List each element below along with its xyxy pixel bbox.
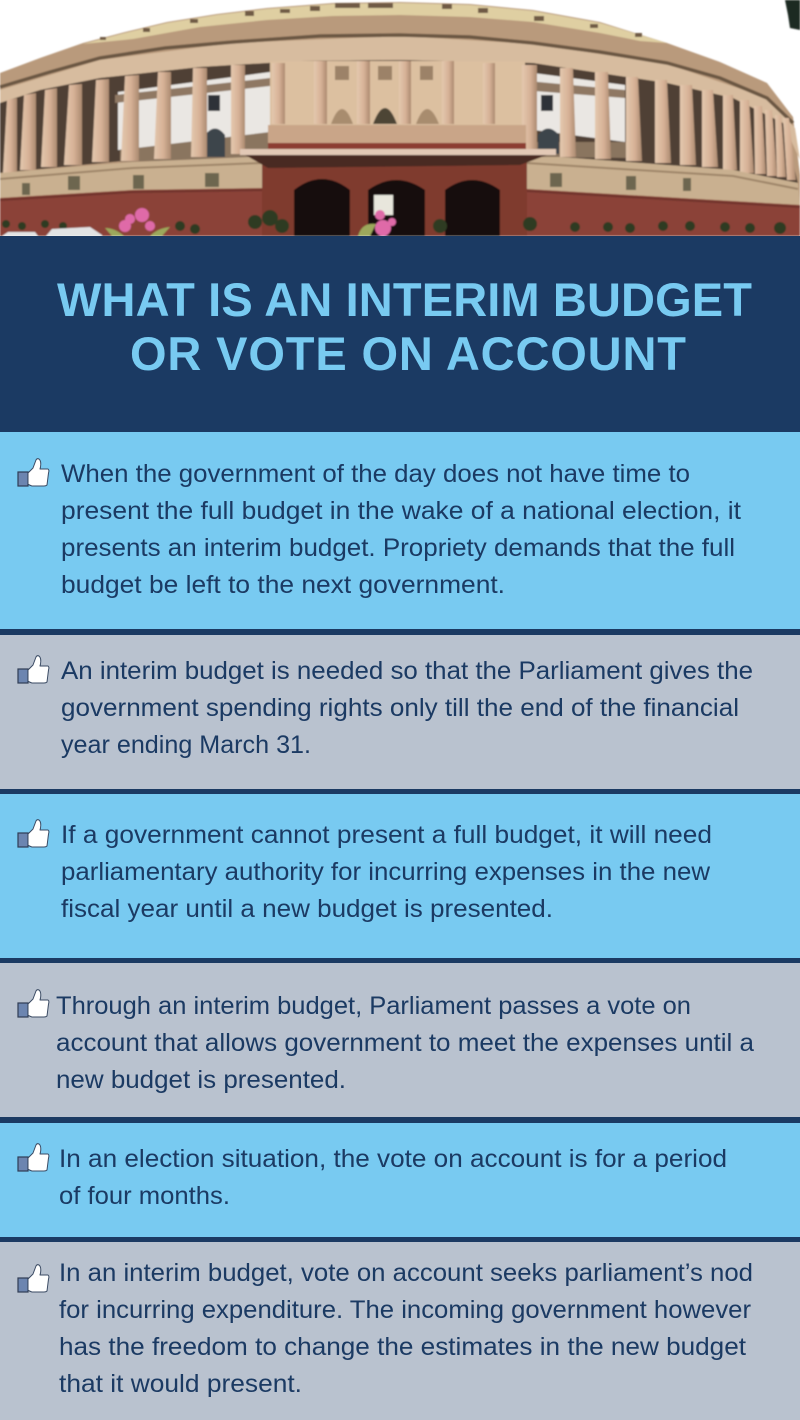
panel: spending rights <box>0 635 800 789</box>
pink flowers <box>119 208 396 236</box>
icon: thumbs up <box>18 459 49 486</box>
text block: new budget is presented. <box>56 1066 346 1094</box>
icon: thumbs up <box>18 656 49 683</box>
text block <box>59 1145 727 1210</box>
text block: present the full budget in the wake of a national election, it <box>61 497 741 525</box>
text block: In an interim budget, vote on account seeks parliament’s nod <box>59 1259 753 1287</box>
tree <box>785 0 800 30</box>
text block <box>61 821 712 923</box>
building mass <box>0 2 800 236</box>
panel: freedom to change estimates <box>0 1242 800 1420</box>
text block <box>61 460 741 599</box>
plinth <box>0 157 800 205</box>
text block: parliamentary authority for incurring expenses in the new <box>61 858 711 886</box>
panel: parliamentary authority <box>0 794 800 958</box>
car <box>46 227 102 236</box>
colonnade wall <box>0 60 798 183</box>
text block <box>61 657 753 759</box>
lower entablature <box>0 36 800 160</box>
text block: has the freedom to change the estimates in the new budget <box>59 1333 746 1361</box>
icon: thumbs up <box>18 1265 49 1292</box>
heading: OR VOTE ON ACCOUNT <box>130 327 686 380</box>
text block: account that allows government to meet the expenses until a <box>56 1029 754 1057</box>
text block: An interim budget is needed so that the Parliament gives the <box>61 657 753 685</box>
text block <box>56 992 754 1094</box>
text block: government spending rights only till the end of the financial <box>61 694 739 722</box>
upper central stone wall <box>270 61 525 126</box>
columns left <box>3 98 17 173</box>
text block: In an election situation, the vote on account is for a period <box>59 1145 727 1173</box>
text block: budget be left to the next government. <box>61 571 505 599</box>
text block: that it would present. <box>59 1370 302 1398</box>
plants <box>2 210 786 234</box>
portico <box>268 125 526 150</box>
heading: WHAT IS AN INTERIM BUDGET <box>57 273 752 326</box>
red base <box>0 188 800 236</box>
parapet band <box>83 3 667 44</box>
text block: for incurring expenditure. The incoming government however <box>59 1296 751 1324</box>
icon: thumbs up <box>18 990 49 1017</box>
panel: four months <box>0 1123 800 1237</box>
text block: year ending March 31. <box>61 731 311 759</box>
columns right <box>399 61 411 124</box>
heading <box>57 273 752 380</box>
title banner <box>0 236 800 432</box>
text block: Through an interim budget, Parliament passes a vote on <box>56 992 691 1020</box>
text block: presents an interim budget. Propriety demands that the full <box>61 534 735 562</box>
text block: When the government of the day does not have time to <box>61 460 690 488</box>
panel: vote on account <box>0 963 800 1117</box>
text block: of four months. <box>59 1182 230 1210</box>
text block <box>59 1259 753 1398</box>
photo: Parliament House of India <box>0 0 800 236</box>
text block: fiscal year until a new budget is presented. <box>61 895 553 923</box>
icon: thumbs up <box>18 820 49 847</box>
text block: If a government cannot present a full budget, it will need <box>61 821 712 849</box>
panel: full budget left to next government <box>0 432 800 629</box>
icon: thumbs up <box>18 1144 49 1171</box>
